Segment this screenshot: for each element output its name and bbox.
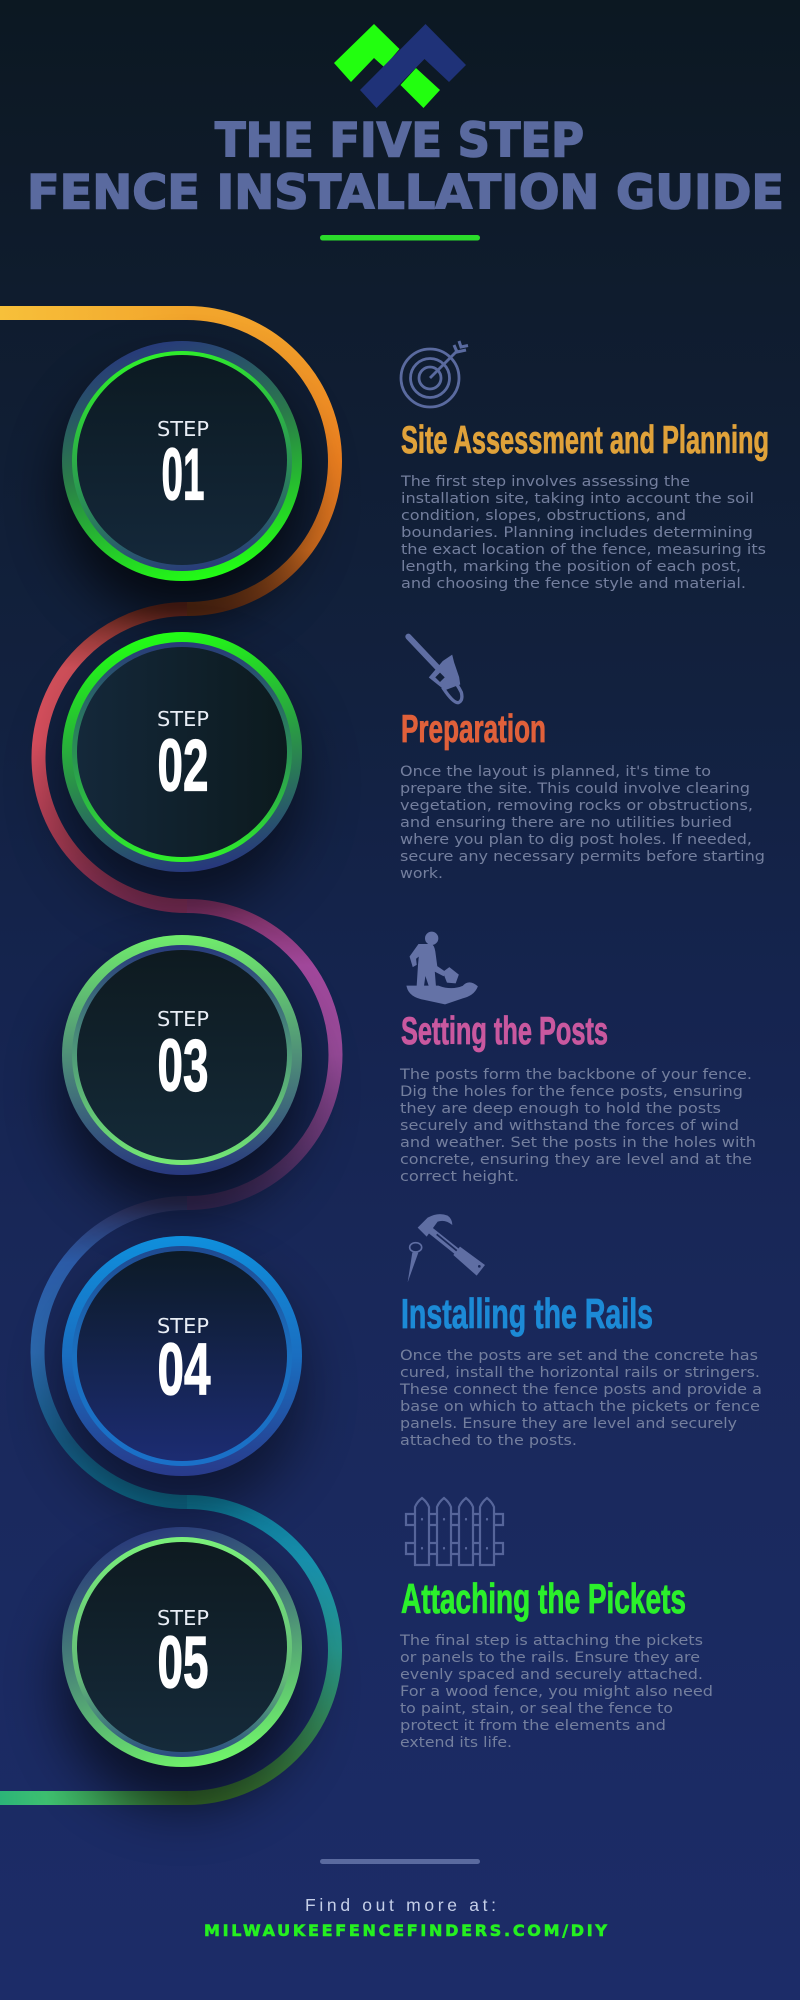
body text: concrete, ensuring they are level and at the — [400, 1152, 752, 1168]
body text — [399, 1067, 756, 1185]
title: FENCE INSTALLATION GUIDE — [27, 166, 784, 220]
body text: panels. Ensure they are level and securely — [400, 1416, 738, 1432]
body text: securely and withstand the forces of wind — [400, 1118, 739, 1134]
body text: The final step is attaching the pickets — [399, 1633, 703, 1649]
footer call to action: Find out more at: — [305, 1895, 496, 1915]
panel: step 1 site assessment — [400, 341, 769, 592]
panel: step 3 setting the posts — [399, 933, 756, 1185]
body text: protect it from the elements and — [400, 1718, 666, 1734]
body text: and ensuring there are no utilities buried — [400, 815, 732, 831]
body text: cured, install the horizontal rails or stringers. — [400, 1365, 760, 1381]
step badge 4 — [62, 1236, 302, 1476]
body text — [399, 1633, 713, 1751]
icon: picket fence — [406, 1498, 503, 1565]
body text: or panels to the rails. Ensure they are — [400, 1650, 700, 1666]
body text: vegetation, removing rocks or obstructions, — [400, 798, 753, 814]
icon: hammer and nail — [408, 1214, 485, 1282]
body text: These connect the fence posts and provide a — [399, 1382, 762, 1398]
step badge 1: 01 — [162, 434, 204, 516]
body text: correct height. — [400, 1169, 519, 1185]
logo — [334, 24, 466, 108]
body text: secure any necessary permits before starting — [400, 849, 765, 865]
step badge 3 — [62, 935, 302, 1175]
footer call to action — [204, 1895, 607, 1940]
heading: Setting the Posts — [401, 1010, 608, 1053]
icon: digging worker — [408, 933, 477, 1003]
step badge 5: STEP — [157, 1606, 209, 1630]
step badge 4: 04 — [158, 1330, 211, 1410]
heading: Installing the Rails — [401, 1290, 653, 1337]
footer call to action: MILWAUKEEFENCEFINDERS.COM/DIY — [204, 1921, 607, 1940]
body text: For a wood fence, you might also need — [400, 1684, 713, 1700]
body text: Dig the holes for the fence posts, ensuring — [400, 1084, 743, 1100]
body text: base on which to attach the pickets or fence — [400, 1399, 760, 1415]
body text: The first step involves assessing the — [400, 474, 690, 490]
body text: they are deep enough to hold the posts — [400, 1101, 721, 1117]
step badge 1 — [62, 341, 302, 581]
body text: prepare the site. This could involve clearing — [400, 781, 750, 797]
body text: and choosing the fence style and material. — [401, 576, 746, 592]
body text: The posts form the backbone of your fence. — [399, 1067, 752, 1083]
panel: step 2 preparation — [400, 637, 765, 882]
body text: and weather. Set the posts in the holes with — [400, 1135, 756, 1151]
body text: attached to the posts. — [400, 1433, 577, 1449]
step badge 2: STEP — [157, 707, 209, 731]
step badge 3: 03 — [158, 1026, 208, 1106]
body text: to paint, stain, or seal the fence to — [400, 1701, 673, 1717]
body text: work. — [400, 866, 443, 882]
body text: where you plan to dig post holes. If needed, — [400, 832, 752, 848]
body text: the exact location of the fence, measuring its — [401, 542, 766, 558]
panel: step 5 attaching the pickets — [399, 1498, 713, 1751]
step badge 1: STEP — [157, 417, 209, 441]
body text: Once the layout is planned, it's time to — [400, 764, 711, 780]
body text: installation site, taking into account the soil — [401, 491, 754, 507]
body text: condition, slopes, obstructions, and — [401, 508, 686, 524]
winding path connecting the steps — [0, 313, 336, 1798]
heading: Preparation — [401, 708, 546, 751]
body text: length, marking the position of each post, — [401, 559, 741, 575]
body text: boundaries. Planning includes determining — [401, 525, 753, 541]
icon: chainsaw — [408, 637, 462, 703]
step badge 5: 05 — [158, 1622, 208, 1704]
body text: evenly spaced and securely attached. — [400, 1667, 703, 1683]
step badge 3: STEP — [157, 1007, 209, 1031]
body text: Once the posts are set and the concrete has — [400, 1348, 758, 1364]
panel: step 4 installing the rails — [399, 1214, 762, 1449]
step badge 2 — [62, 632, 302, 872]
step badge 4: STEP — [157, 1314, 209, 1338]
icon: target with arrow — [401, 341, 468, 407]
body text — [400, 764, 765, 882]
body text — [400, 474, 766, 592]
step badge 2: 02 — [158, 726, 208, 806]
step badge 5 — [62, 1527, 302, 1767]
body text — [399, 1348, 762, 1449]
body text: extend its life. — [400, 1735, 512, 1751]
title: THE FIVE STEP — [215, 114, 584, 168]
title — [27, 114, 784, 220]
